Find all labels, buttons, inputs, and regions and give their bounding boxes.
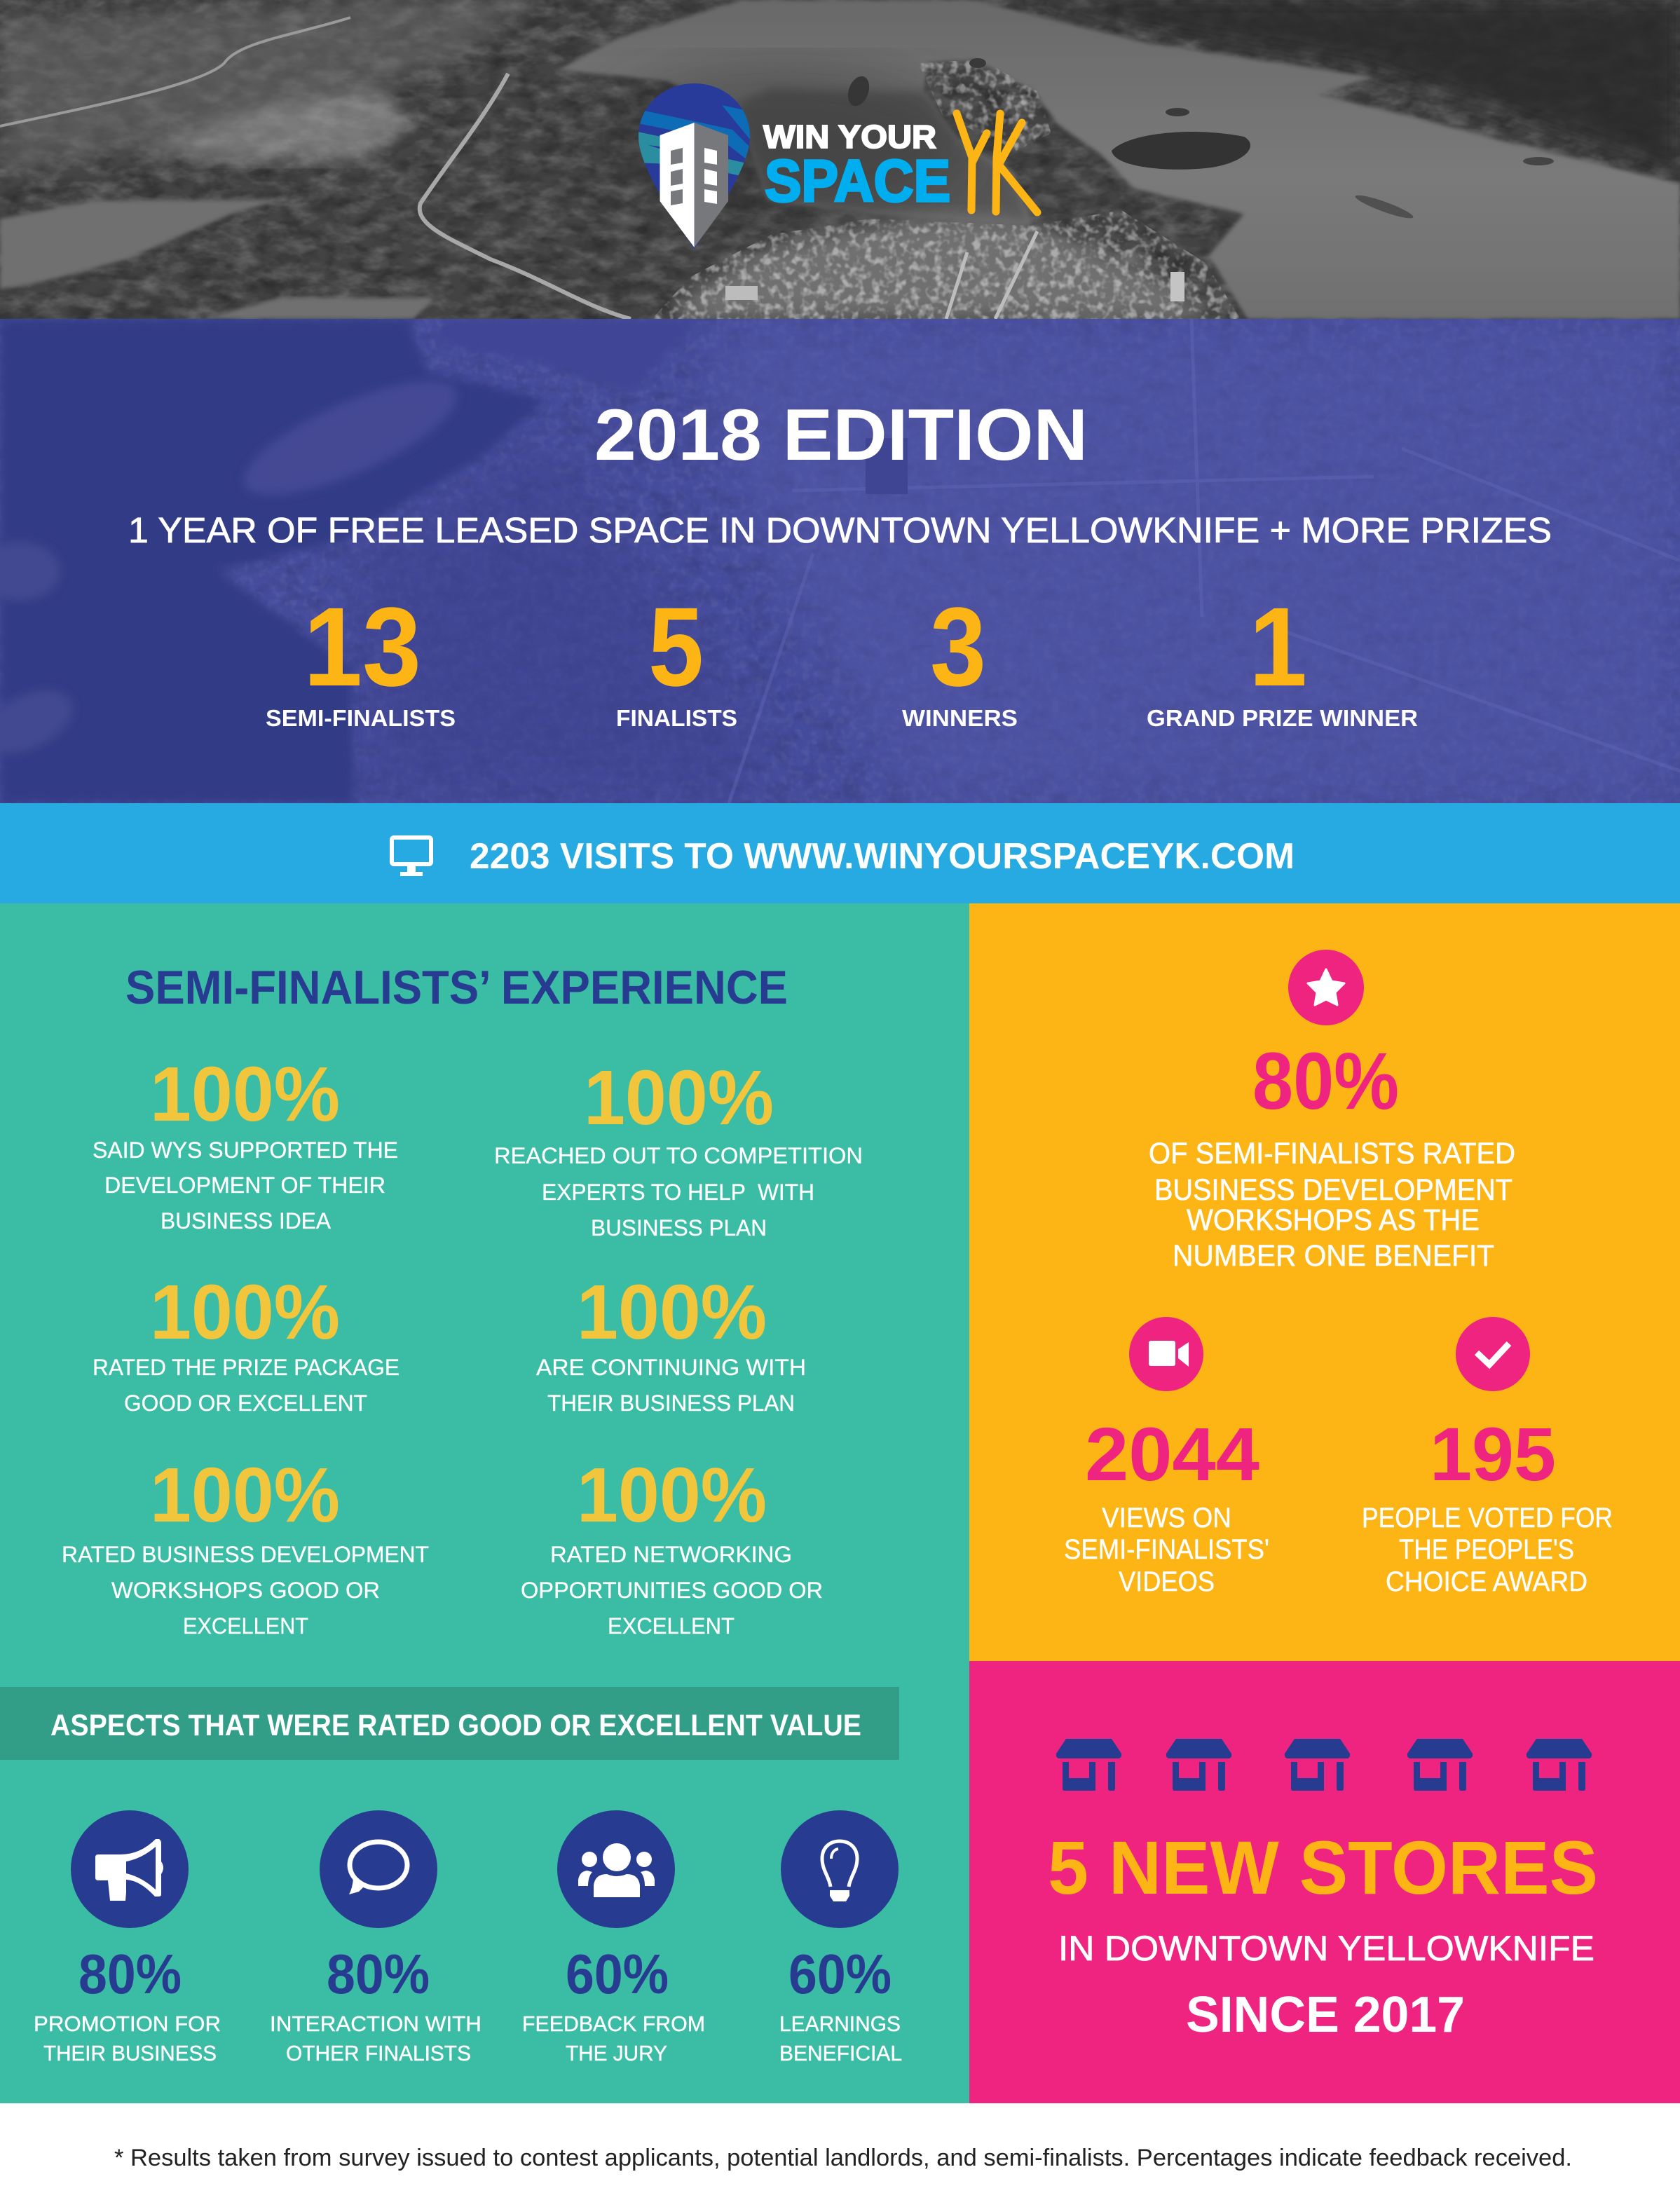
header aerial photo [0,0,1680,319]
blue aerial photo background [0,319,1680,803]
stat: reached out to experts: EXPERTS TO HELP WITH [542,1180,814,1205]
aspect: learnings 60% [779,1810,902,2065]
stat: 3 winners [902,584,1018,731]
aspect: learnings 60%: BENEFICIAL [779,2041,902,2065]
aspect: learnings 60%: 60% [788,1943,892,2005]
aspect: jury feedback 60% [522,1810,705,2065]
stat: 3 winners: 3 [930,584,986,709]
stat: reached out to experts: BUSINESS PLAN [591,1215,767,1241]
aspect: promotion 80%: PROMOTION FOR [34,2011,221,2036]
logo text: WIN YOUR: WIN YOUR [763,118,936,155]
stat: 3 winners: WINNERS [902,705,1018,731]
panel: 5 new stores [969,1661,1680,2103]
stat: supported business idea [93,1051,398,1234]
stat: 5 finalists: FINALISTS [616,705,737,731]
aspect: promotion 80%: 80% [78,1943,182,2005]
stat: rated networking: 100% [577,1452,767,1538]
panel: website visits bar [0,803,1680,903]
stat: rated networking: RATED NETWORKING [550,1542,792,1567]
visits text: 2203 VISITS TO WWW.WINYOURSPACEYK.COM [470,836,1295,877]
aspect: learnings 60%: LEARNINGS [779,2011,901,2036]
subhead: since 2017: SINCE 2017 [1186,1987,1465,2043]
stat: reached out to experts [494,1055,863,1241]
stat: 80% number one benefit: BUSINESS DEVELOPMENT [1154,1173,1512,1207]
stat: rated networking: OPPORTUNITIES GOOD OR [521,1578,823,1603]
stat: rated networking [521,1452,823,1639]
stat: rated prize package: GOOD OR EXCELLENT [124,1391,367,1416]
stat: rated workshops: WORKSHOPS GOOD OR [111,1578,380,1603]
aspect: promotion 80% [34,1810,221,2065]
aspect: jury feedback 60%: 60% [566,1943,669,2005]
icon: megaphone [71,1810,189,1928]
stat: rated prize package [93,1269,399,1416]
stat: 2044 video views: VIDEOS [1119,1566,1215,1597]
stat: 1 grand prize winner: GRAND PRIZE WINNER [1147,705,1418,731]
footnote: * Results taken from survey issued to contest applicants, potential landlords, and semi-finalists. Percentages indicate feedback received. [114,2145,1572,2171]
stat: continuing business plan: ARE CONTINUING WITH [536,1355,806,1380]
stat: 5 finalists: 5 [648,584,704,709]
panel: semi-finalists' experience [0,903,969,2103]
panel: 2018 edition banner [0,319,1680,803]
stat: 13 semi-finalists [266,584,456,731]
stat: 2044 video views: SEMI-FINALISTS' [1064,1534,1269,1565]
icon: people [557,1810,675,1928]
stat: rated workshops: 100% [150,1452,340,1538]
logo: Win Your Space YK [638,83,1042,249]
stat: 80% number one benefit: OF SEMI-FINALISTS RATED [1149,1137,1515,1170]
stat: rated prize package: 100% [150,1269,340,1355]
stat: 2044 video views: 2044 [1085,1412,1259,1496]
icons: five storefronts [1056,1739,1592,1791]
stat: rated workshops: RATED BUSINESS DEVELOPMENT [62,1542,429,1567]
aspect: interaction 80%: OTHER FINALISTS [286,2041,471,2065]
stat: rated workshops [62,1452,429,1639]
stat: 2044 video views [1064,1317,1269,1597]
aspect: interaction 80%: 80% [327,1943,430,2005]
subhead: downtown: IN DOWNTOWN YELLOWKNIFE [1058,1929,1594,1968]
stat: supported business idea: SAID WYS SUPPORTED THE [93,1137,398,1163]
stat: 80% number one benefit [1149,1037,1515,1273]
stat: 80% number one benefit: 80% [1252,1037,1399,1126]
aspect: promotion 80%: THEIR BUSINESS [43,2041,217,2065]
stat: rated workshops: EXCELLENT [183,1613,308,1639]
stat: supported business idea: 100% [150,1051,340,1137]
stat: 195 people voted: PEOPLE VOTED FOR [1362,1503,1613,1533]
stat: 195 people voted: 195 [1430,1412,1556,1496]
icon: video camera [1129,1317,1203,1391]
icon: light bulb [781,1810,899,1928]
stat: 2044 video views: VIEWS ON [1102,1503,1231,1533]
aspect: jury feedback 60%: THE JURY [566,2041,667,2065]
stat: 195 people voted [1362,1317,1613,1597]
aspect: interaction 80% [270,1810,482,2065]
stat: 13 semi-finalists: SEMI-FINALISTS [266,705,456,731]
stat: 5 finalists [616,584,737,731]
logo: YK hand-drawn mark [0,0,1037,212]
stat: 1 grand prize winner [1147,584,1418,731]
band: aspects heading [0,1687,899,1760]
logo text: SPACE: SPACE [765,148,950,214]
stat: 195 people voted: THE PEOPLE'S [1399,1534,1574,1565]
stat: continuing business plan: THEIR BUSINESS PLAN [547,1391,795,1416]
subtitle: prize: 1 YEAR OF FREE LEASED SPACE IN DOWNTOWN YELLOWKNIFE + MORE PRIZES [128,510,1552,550]
icon: location pin with building [634,83,753,249]
stat: 1 grand prize winner: 1 [1249,584,1307,709]
stat: rated prize package: RATED THE PRIZE PACKAGE [93,1355,399,1380]
stat: supported business idea: BUSINESS IDEA [161,1208,332,1234]
icon: star [1288,950,1364,1025]
stat: 80% number one benefit: WORKSHOPS AS THE [1187,1203,1480,1237]
title: 2018 edition: 2018 EDITION [594,395,1088,476]
stat: rated networking: EXCELLENT [608,1613,735,1639]
stat: 195 people voted: CHOICE AWARD [1386,1566,1587,1597]
stat: 80% number one benefit: NUMBER ONE BENEFIT [1173,1239,1494,1273]
stat: reached out to experts: REACHED OUT TO COMPETITION [494,1143,863,1168]
icon: check mark [1456,1317,1530,1391]
aspect: interaction 80%: INTERACTION WITH [270,2011,482,2036]
band: aspects heading: ASPECTS THAT WERE RATED GOOD OR EXCELLENT VALUE [50,1709,861,1742]
icon: speech bubble [320,1810,437,1928]
stat: 13 semi-finalists: 13 [303,584,421,709]
heading: SEMI-FINALISTS’ EXPERIENCE [125,961,788,1014]
headline: 5 new stores: 5 NEW STORES [1048,1825,1598,1910]
icon: monitor [392,838,431,876]
stat: supported business idea: DEVELOPMENT OF THEIR [104,1173,385,1198]
stat: continuing business plan [536,1269,806,1416]
aspect: jury feedback 60%: FEEDBACK FROM [522,2011,705,2036]
panel: workshops and votes [969,903,1680,1661]
stat: continuing business plan: 100% [577,1269,767,1355]
stat: reached out to experts: 100% [584,1055,774,1141]
